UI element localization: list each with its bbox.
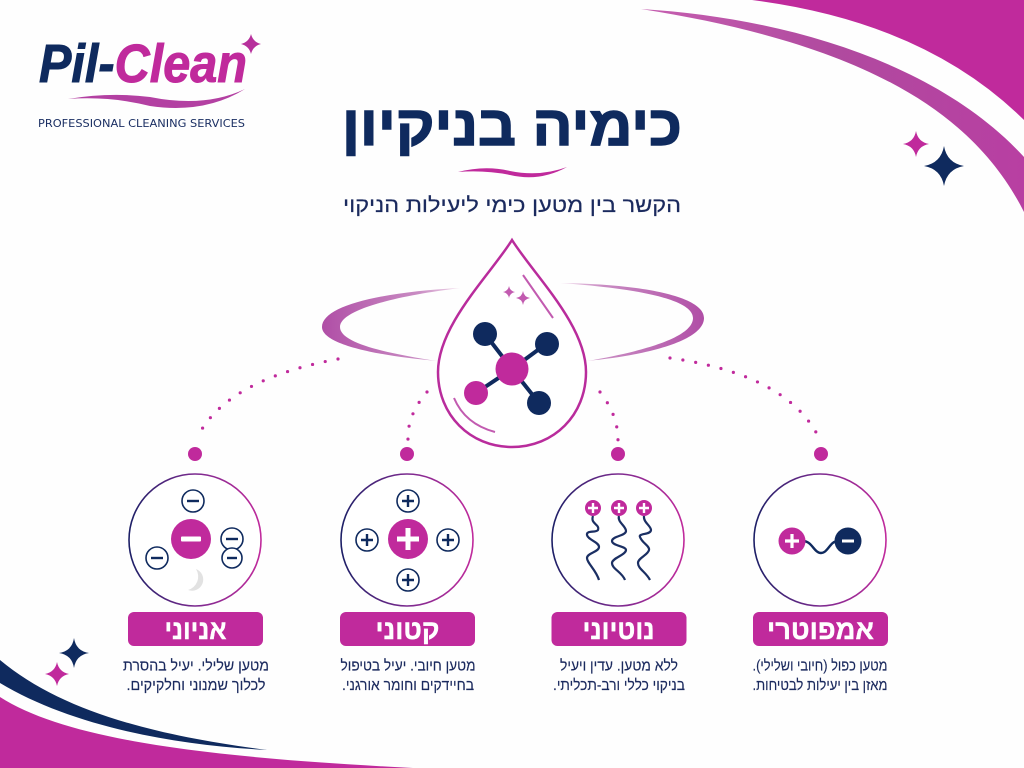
panel: anionic bbox=[123, 474, 269, 694]
icon: amphoteric molecule bbox=[754, 474, 886, 606]
subtitle: הקשר בין מטען כימי ליעילות הניקוי bbox=[343, 194, 681, 217]
pill label: nonionic: נוטיוני bbox=[582, 615, 654, 645]
dotted connectors bbox=[197, 358, 820, 440]
pill label: nonionic bbox=[552, 612, 686, 646]
pill label: cationic: קטוני bbox=[376, 615, 440, 645]
panel: nonionic bbox=[552, 474, 686, 694]
icon: anionic charges bbox=[129, 474, 261, 606]
description: amphoteric bbox=[752, 658, 888, 694]
description: amphoteric: מטען כפול (חיובי ושלילי). bbox=[752, 658, 888, 674]
description: cationic: בחיידקים וחומר אורגני. bbox=[342, 677, 474, 694]
icon: top-right sparkles bbox=[903, 131, 964, 186]
description: amphoteric: מאזן בין יעילות לבטיחות. bbox=[752, 677, 888, 694]
top-right corner swoosh bbox=[641, 0, 1024, 212]
icon: cationic charges bbox=[341, 474, 473, 606]
icon: nonionic chains bbox=[552, 474, 684, 606]
logo bbox=[38, 34, 261, 130]
title underline squiggle bbox=[458, 167, 567, 177]
logo: Pil-Clean bbox=[39, 34, 247, 94]
description: nonionic bbox=[553, 658, 685, 694]
orbit crescents bbox=[322, 283, 704, 361]
pill label: amphoteric bbox=[753, 612, 888, 646]
description: cationic: מטען חיובי. יעיל בטיפול bbox=[340, 658, 476, 674]
panel: cationic bbox=[340, 474, 476, 694]
icon: bottom-left sparkles bbox=[45, 638, 89, 686]
logo: PROFESSIONAL CLEANING SERVICES bbox=[38, 118, 245, 130]
title: כימיה בניקיון bbox=[342, 94, 682, 157]
description: anionic: לכלוך שמנוני וחלקיקים. bbox=[126, 677, 266, 694]
pill label: anionic bbox=[128, 612, 263, 646]
bottom-left corner swoosh bbox=[0, 660, 413, 768]
panel: amphoteric bbox=[752, 474, 888, 694]
description: cationic bbox=[340, 658, 476, 694]
description: anionic: מטען שלילי. יעיל בהסרת bbox=[123, 658, 269, 674]
pill label: cationic bbox=[340, 612, 475, 646]
pill label: anionic: אניוני bbox=[164, 615, 226, 645]
pill label: amphoteric: אמפוטרי bbox=[767, 615, 874, 645]
description: nonionic: ללא מטען. עדין ויעיל bbox=[560, 658, 678, 674]
icon: water drop with molecule bbox=[438, 240, 586, 447]
icon: logo sparkle bbox=[241, 34, 261, 54]
description: nonionic: בניקוי כללי ורב-תכליתי. bbox=[553, 677, 685, 694]
connector end dots bbox=[188, 447, 828, 461]
description: anionic bbox=[123, 658, 269, 694]
